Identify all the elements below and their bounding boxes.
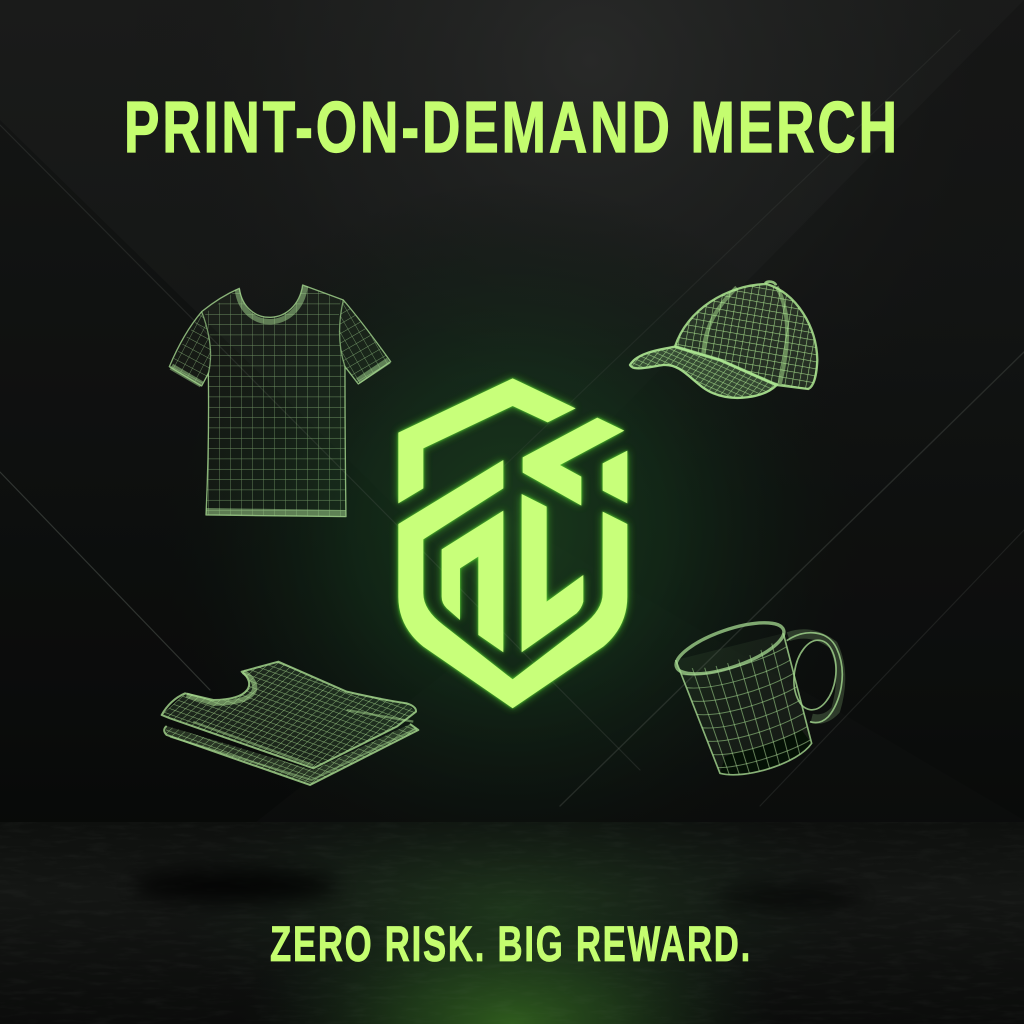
icon: wireframe baseball cap (630, 282, 817, 398)
icon: wireframe folded shirt (162, 662, 418, 785)
floor (0, 822, 1024, 1024)
icon: wireframe t-shirt (169, 285, 391, 517)
icon: wireframe mug (670, 612, 842, 777)
background diagonal light lines (0, 30, 1024, 806)
logo: glowing shield (398, 378, 627, 708)
tagline: ZERO RISK. BIG REWARD. (270, 916, 752, 972)
